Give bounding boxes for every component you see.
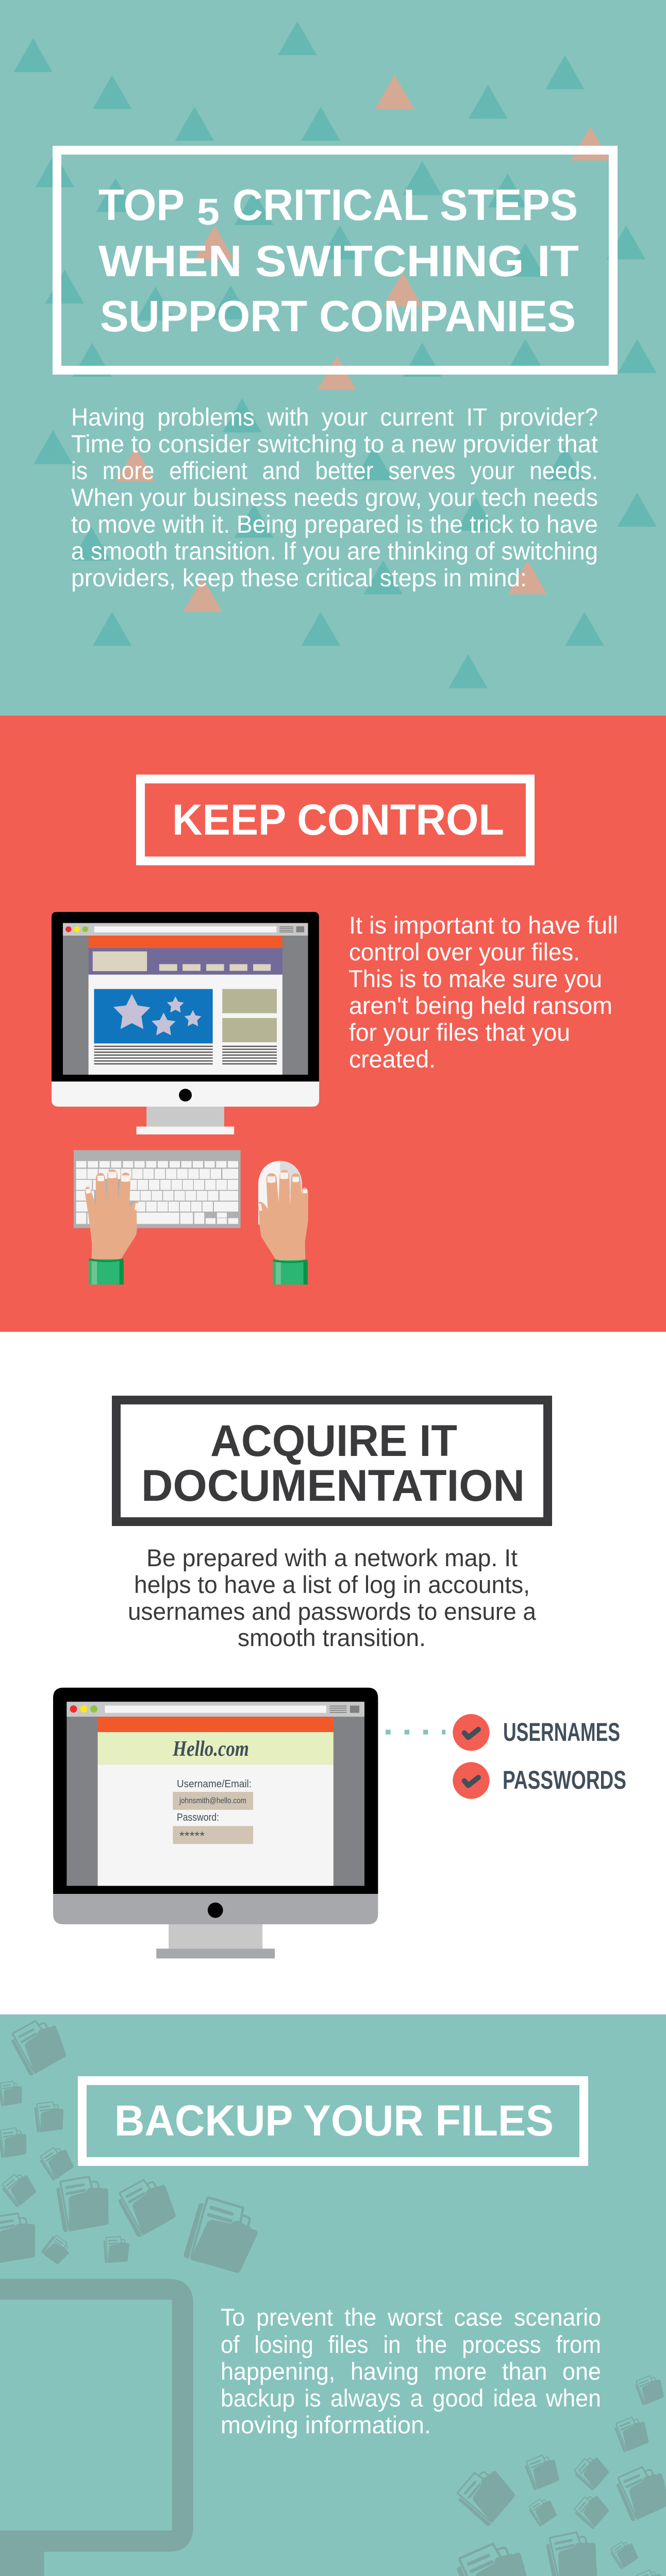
- icon: flying folders right: [453, 2373, 666, 2576]
- intro text: When your business needs grow, your tech needs: [71, 484, 598, 512]
- body text: control over your files.: [349, 938, 580, 965]
- heading: BACKUP YOUR FILES: [114, 2096, 554, 2145]
- background triangles: [13, 21, 657, 688]
- body text: smooth transition.: [238, 1624, 426, 1651]
- icon: login monitor: [53, 1688, 378, 1958]
- body text: aren't being held ransom: [349, 992, 612, 1019]
- check: usernames: [453, 1714, 620, 1751]
- panel: acquire IT documentation: [0, 1332, 666, 2014]
- login form labels: Password:: [177, 1812, 219, 1823]
- left sleeve: [89, 1259, 124, 1284]
- title: 5: [197, 192, 220, 233]
- site logo: Hello.com: [172, 1737, 249, 1761]
- body text: helps to have a list of log in accounts,: [134, 1571, 530, 1598]
- title: WHEN SWITCHING IT: [98, 237, 579, 286]
- body text: usernames and passwords to ensure a: [128, 1598, 537, 1625]
- body text: Be prepared with a network map. It: [146, 1544, 518, 1571]
- body text: happening, having more than one: [221, 2358, 601, 2385]
- panel: intro: [0, 0, 666, 716]
- body text: To prevent the worst case scenario: [221, 2303, 601, 2331]
- title: CRITICAL STEPS: [232, 181, 578, 230]
- title: TOP: [98, 181, 185, 230]
- heading box: [82, 2080, 584, 2162]
- login form labels: Username/Email:: [177, 1778, 252, 1790]
- intro text: to move with it. Being prepared is the trick to have: [71, 511, 598, 538]
- title: [98, 181, 579, 341]
- check: passwords: [453, 1762, 626, 1799]
- check: usernames: USERNAMES: [503, 1718, 620, 1747]
- dotted connector: [386, 1730, 445, 1735]
- intro text: Time to consider switching to a new provider that: [71, 431, 598, 458]
- heading: KEEP CONTROL: [172, 795, 504, 844]
- heading: DOCUMENTATION: [141, 1461, 525, 1511]
- body text: [348, 911, 618, 1073]
- title box: [57, 150, 613, 370]
- login form labels: [177, 1778, 252, 1842]
- title: SUPPORT COMPANIES: [100, 292, 576, 341]
- body text: for your files that you: [349, 1019, 570, 1046]
- icon: flying folders left: [0, 2014, 264, 2278]
- body text: [128, 1544, 537, 1651]
- check: passwords: PASSWORDS: [503, 1766, 626, 1794]
- login form labels: *****: [179, 1829, 205, 1842]
- body text: moving information.: [221, 2411, 431, 2438]
- icon: keyboard, mouse and hands: [74, 1150, 308, 1284]
- icon: monitor outline: [0, 2279, 193, 2576]
- intro text: Having problems with your current IT provider?: [71, 404, 598, 431]
- icon: desktop monitor: [52, 912, 319, 1134]
- heading box: [116, 1400, 547, 1522]
- left hand: [85, 1170, 138, 1260]
- body text: of losing files in the process from: [221, 2331, 601, 2358]
- heading box: [140, 779, 530, 861]
- body text: [221, 2303, 601, 2438]
- intro text: a smooth transition. If you are thinking of switching: [71, 538, 598, 565]
- login form labels: johnsmith@hello.com: [179, 1797, 246, 1805]
- body text: created.: [349, 1045, 436, 1073]
- right hand: [258, 1170, 308, 1261]
- panel: keep control: [0, 716, 666, 1332]
- heading: ACQUIRE IT: [210, 1416, 457, 1466]
- intro text: [71, 404, 598, 592]
- body text: This is to make sure you: [348, 965, 602, 992]
- heading: [141, 1416, 525, 1511]
- mouse: [258, 1161, 302, 1225]
- intro text: providers, keep these critical steps in mind:: [71, 565, 527, 592]
- panel: backup your files: [0, 2014, 666, 2576]
- right sleeve: [273, 1260, 308, 1284]
- body text: backup is always a good idea when: [221, 2384, 601, 2412]
- body text: It is important to have full: [349, 911, 618, 939]
- intro text: is more efficient and better serves your needs.: [71, 457, 598, 485]
